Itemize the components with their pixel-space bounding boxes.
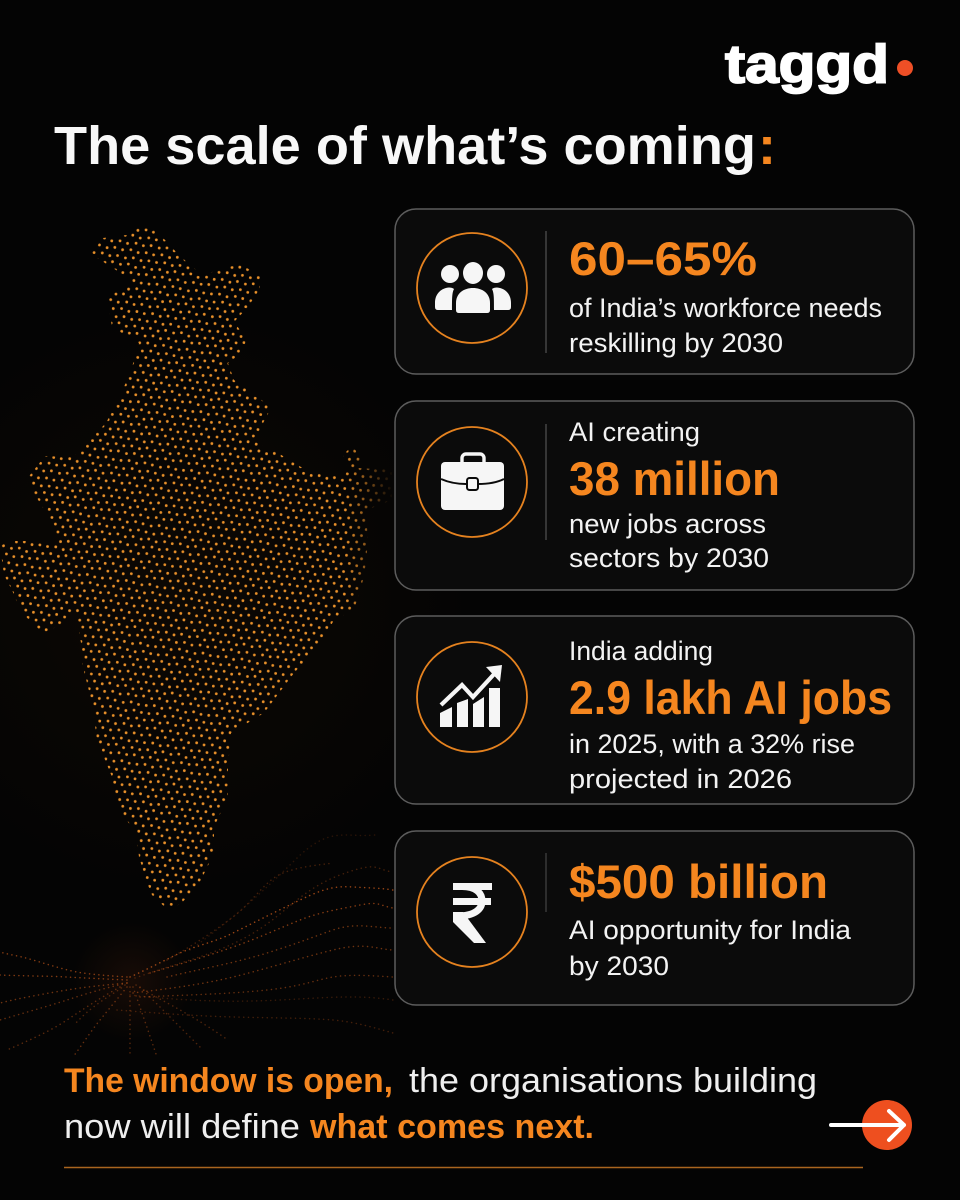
description	[569, 915, 852, 981]
closing statement: The window is open,	[64, 1062, 393, 1100]
stat: 60–65%: 60–65%	[569, 232, 757, 285]
text: AI creating: AI creating	[569, 417, 700, 447]
panel: new jobs	[395, 401, 914, 590]
logo: taggd: taggd	[725, 34, 889, 94]
icon: briefcase	[417, 427, 527, 537]
panel: AI jobs	[395, 616, 914, 804]
closing statement: now will define	[64, 1108, 300, 1146]
stat: 2.9 lakh AI jobs: 2.9 lakh AI jobs	[569, 671, 892, 724]
icon: people	[417, 233, 527, 343]
icon: growth chart	[417, 642, 527, 752]
icon: rupee	[417, 857, 527, 967]
stat: 38 million: 38 million	[569, 452, 780, 505]
map glow	[0, 200, 960, 1000]
description	[569, 729, 855, 794]
dotted map of India	[0, 224, 392, 909]
description: of India’s workforce needs	[569, 293, 882, 323]
description	[569, 293, 882, 358]
description: in 2025, with a 32% rise	[569, 729, 855, 759]
description: projected in 2026	[569, 764, 792, 794]
description: reskilling by 2030	[569, 328, 783, 358]
description: AI opportunity for India	[569, 915, 852, 945]
flowing dotted waves	[0, 835, 393, 1057]
closing statement	[64, 1062, 817, 1146]
title: The scale of what’s coming	[54, 116, 756, 176]
description: by 2030	[569, 951, 669, 981]
arrow button	[831, 1100, 912, 1150]
closing statement: the organisations building	[409, 1062, 817, 1100]
closing statement: what comes next.	[309, 1108, 594, 1146]
text: India adding: India adding	[569, 636, 713, 666]
panel: AI opportunity	[395, 831, 914, 1005]
description: sectors by 2030	[569, 543, 769, 573]
description	[569, 509, 769, 573]
description: new jobs across	[569, 509, 766, 539]
title: :	[758, 116, 776, 176]
stat: $500 billion: $500 billion	[569, 855, 828, 908]
panel: workforce reskilling	[395, 209, 914, 374]
